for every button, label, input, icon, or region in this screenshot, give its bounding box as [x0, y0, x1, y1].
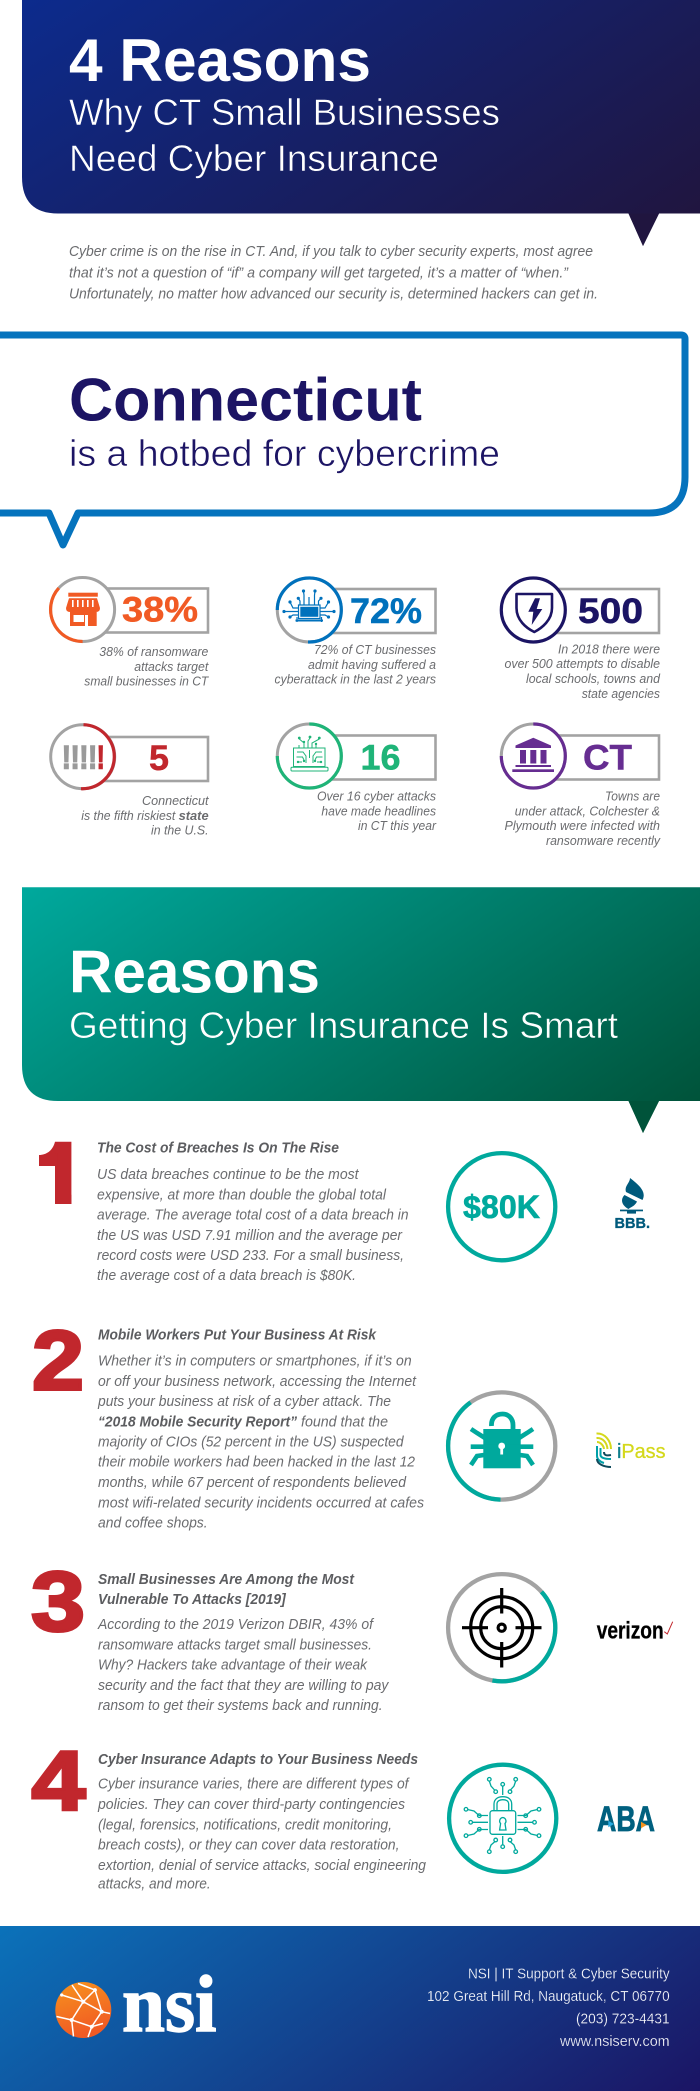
body text: expensive, at more than double the global total: [97, 1187, 387, 1203]
body text: Cyber insurance varies, there are different types of: [98, 1777, 410, 1793]
contact details: 102 Great Hill Rd, Naugatuck, CT 06770: [427, 1988, 670, 2005]
caption: Plymouth were infected with: [504, 818, 660, 833]
icon: bug lock circle: [448, 1392, 555, 1500]
contact details: (203) 723-4431: [576, 2010, 670, 2027]
heading: Mobile Workers Put Your Business At Risk: [98, 1327, 377, 1343]
icon: circuit lock circle: [449, 1765, 556, 1872]
subheading: Getting Cyber Insurance Is Smart: [69, 1005, 619, 1046]
value: CT: [583, 738, 632, 777]
icon: $80K circle: $80K: [463, 1189, 540, 1225]
logo: BBB: BBB.: [614, 1215, 650, 1232]
value: 5: [149, 739, 169, 778]
icon: exclamation marks: !: [97, 740, 104, 776]
body text: majority of CIOs (52 percent in the US) suspected: [98, 1435, 404, 1451]
value: 16: [360, 738, 400, 777]
heading: The Cost of Breaches Is On The Rise: [97, 1141, 339, 1157]
body text: Whether it’s in computers or smartphones, if it’s on: [98, 1354, 412, 1370]
body text: [97, 1617, 389, 1714]
body text: record costs were USD 233. For a small business,: [97, 1248, 404, 1264]
heading: Reasons: Reasons: [69, 939, 320, 1006]
body text: months, while 67 percent of respondents believed: [98, 1475, 407, 1491]
panel: Connecticut heading bubble: [0, 335, 685, 545]
body text: their mobile workers had been hacked in the last 12: [98, 1455, 415, 1471]
caption: 72% of CT businesses: [314, 642, 436, 657]
value: 38%: [122, 591, 198, 630]
caption: [84, 644, 210, 689]
stat: 16: [277, 724, 437, 833]
body text: [97, 1354, 424, 1531]
panel: footer: [0, 1926, 700, 2091]
icon: storefront: [66, 593, 100, 626]
body text: ransom to get their systems back and running.: [98, 1698, 383, 1714]
stat: 500: [501, 578, 661, 701]
stat: 5: [51, 725, 210, 837]
icon: $80K circle: [448, 1153, 555, 1260]
value: 72%: [350, 592, 422, 631]
intro paragraph: Cyber crime is on the rise in CT. And, if you talk to cyber security experts, most agree: [69, 244, 593, 260]
panel: green reasons banner: [22, 887, 700, 1133]
icon: bank building: [512, 738, 554, 772]
body text: puts your business at risk of a cyber attack. The: [97, 1394, 391, 1410]
caption: [504, 789, 661, 848]
body text: (legal, forensics, notifications, credit monitoring,: [98, 1817, 392, 1833]
contact details: [427, 1965, 670, 2050]
body text: most wifi-related security incidents occurred at cafes: [98, 1495, 424, 1511]
caption: In 2018 there were: [558, 642, 660, 656]
numeral 4: 4: [32, 1734, 86, 1828]
stat: 72%: [274, 578, 436, 686]
body text: security and the fact that they are willing to pay: [98, 1678, 389, 1694]
body text: Why? Hackers take advantage of their weak: [98, 1658, 368, 1674]
body text: or off your business network, accessing the Internet: [98, 1374, 417, 1390]
caption: [81, 793, 210, 837]
caption: is the fifth riskiest: [81, 808, 177, 823]
caption: under attack, Colchester &: [515, 804, 660, 818]
caption: [274, 642, 436, 686]
heading: Cyber Insurance Adapts to Your Business Needs: [98, 1752, 418, 1768]
reason 3: [31, 1554, 673, 1714]
icon: exclamation marks: !!!!: [62, 740, 97, 776]
panel: blue title banner: [22, 0, 700, 246]
body text: attacks, and more.: [98, 1877, 211, 1893]
contact details: NSI | IT Support & Cyber Security: [468, 1965, 670, 1982]
caption: in the U.S.: [151, 822, 208, 837]
icon: target circle: [448, 1574, 555, 1681]
heading: Connecticut: Connecticut: [69, 366, 422, 434]
body text: average. The average total cost of a data breach in: [97, 1208, 408, 1224]
caption: Connecticut: [142, 793, 210, 808]
intro paragraph: [69, 244, 598, 302]
caption: over 500 attempts to disable: [504, 656, 660, 671]
caption: [504, 642, 661, 701]
title: Why CT Small Businesses: [69, 92, 500, 133]
icon: circuit laptop: [291, 736, 328, 771]
body text: extortion, denial of service attacks, social engineering: [98, 1858, 426, 1874]
caption: state agencies: [582, 686, 660, 701]
contact details: www.nsiserv.com: [559, 2033, 670, 2050]
heading: Vulnerable To Attacks [2019]: [98, 1592, 287, 1608]
title: [69, 27, 500, 179]
caption: 38% of ransomware: [99, 644, 208, 659]
body text: US data breaches continue to be the most: [97, 1167, 359, 1183]
logo: iPass: iPass: [617, 1441, 666, 1463]
body text: found that the: [301, 1414, 388, 1430]
numeral 2: 2: [32, 1314, 84, 1408]
body text: [97, 1777, 426, 1893]
logo: NSI globe: [55, 1961, 216, 2049]
body text: the US was USD 7.91 million and the average per: [97, 1228, 403, 1244]
logo: BBB: [614, 1178, 650, 1232]
body text: breach costs), or they can cover data restoration,: [98, 1838, 400, 1854]
logo: ABA: ABA: [597, 1800, 655, 1839]
body text: “2018 Mobile Security Report”: [98, 1414, 298, 1430]
stat: CT: [501, 724, 661, 848]
body text: According to the 2019 Verizon DBIR, 43% of: [97, 1617, 375, 1633]
caption: [317, 789, 437, 833]
numeral 3: 3: [31, 1554, 85, 1648]
caption: Towns are: [605, 789, 660, 804]
subheading: hotbed: is a hotbed for cybercrime: [69, 433, 500, 474]
numeral 1: [39, 1142, 72, 1204]
heading: Small Businesses Are Among the Most: [98, 1572, 355, 1588]
caption: ransomware recently: [546, 833, 661, 848]
logo: NSI globe: nsi: [122, 1961, 216, 2049]
caption: small businesses in CT: [84, 674, 209, 689]
caption: Over 16 cyber attacks: [317, 789, 436, 804]
caption: cyberattack in the last 2 years: [274, 671, 436, 686]
reason 4: [32, 1734, 655, 1893]
body text: ransomware attacks target small businesses.: [98, 1637, 372, 1653]
reason 1: [39, 1142, 650, 1283]
body text: and coffee shops.: [98, 1515, 208, 1531]
value: 500: [578, 592, 643, 631]
body text: policies. They can cover third-party contingencies: [97, 1797, 405, 1813]
stat: 38%: [51, 578, 210, 689]
numeral 1: 1: [36, 1124, 86, 1224]
reason 2: [32, 1314, 666, 1531]
logo: iPass: [596, 1433, 666, 1467]
title: Need Cyber Insurance: [69, 138, 439, 179]
icon: shield with lightning: [516, 594, 552, 632]
caption: have made headlines: [321, 804, 436, 818]
heading: [98, 1572, 355, 1608]
intro paragraph: that it’s not a question of “if” a company will get targeted, it’s a matter of “when.”: [69, 266, 569, 282]
logo: Verizon: verizon: [597, 1617, 664, 1644]
caption: state: [179, 808, 209, 823]
body text: the average cost of a data breach is $80K.: [97, 1268, 356, 1284]
icon: chip laptop: [282, 589, 336, 622]
caption: admit having suffered a: [308, 657, 436, 672]
intro paragraph: Unfortunately, no matter how advanced our security is, determined hackers can get in.: [69, 286, 598, 302]
title: 4 Reasons: [69, 27, 371, 94]
caption: local schools, towns and: [526, 671, 661, 686]
caption: attacks target: [134, 659, 210, 674]
body text: [97, 1167, 408, 1284]
caption: in CT this year: [358, 818, 437, 833]
